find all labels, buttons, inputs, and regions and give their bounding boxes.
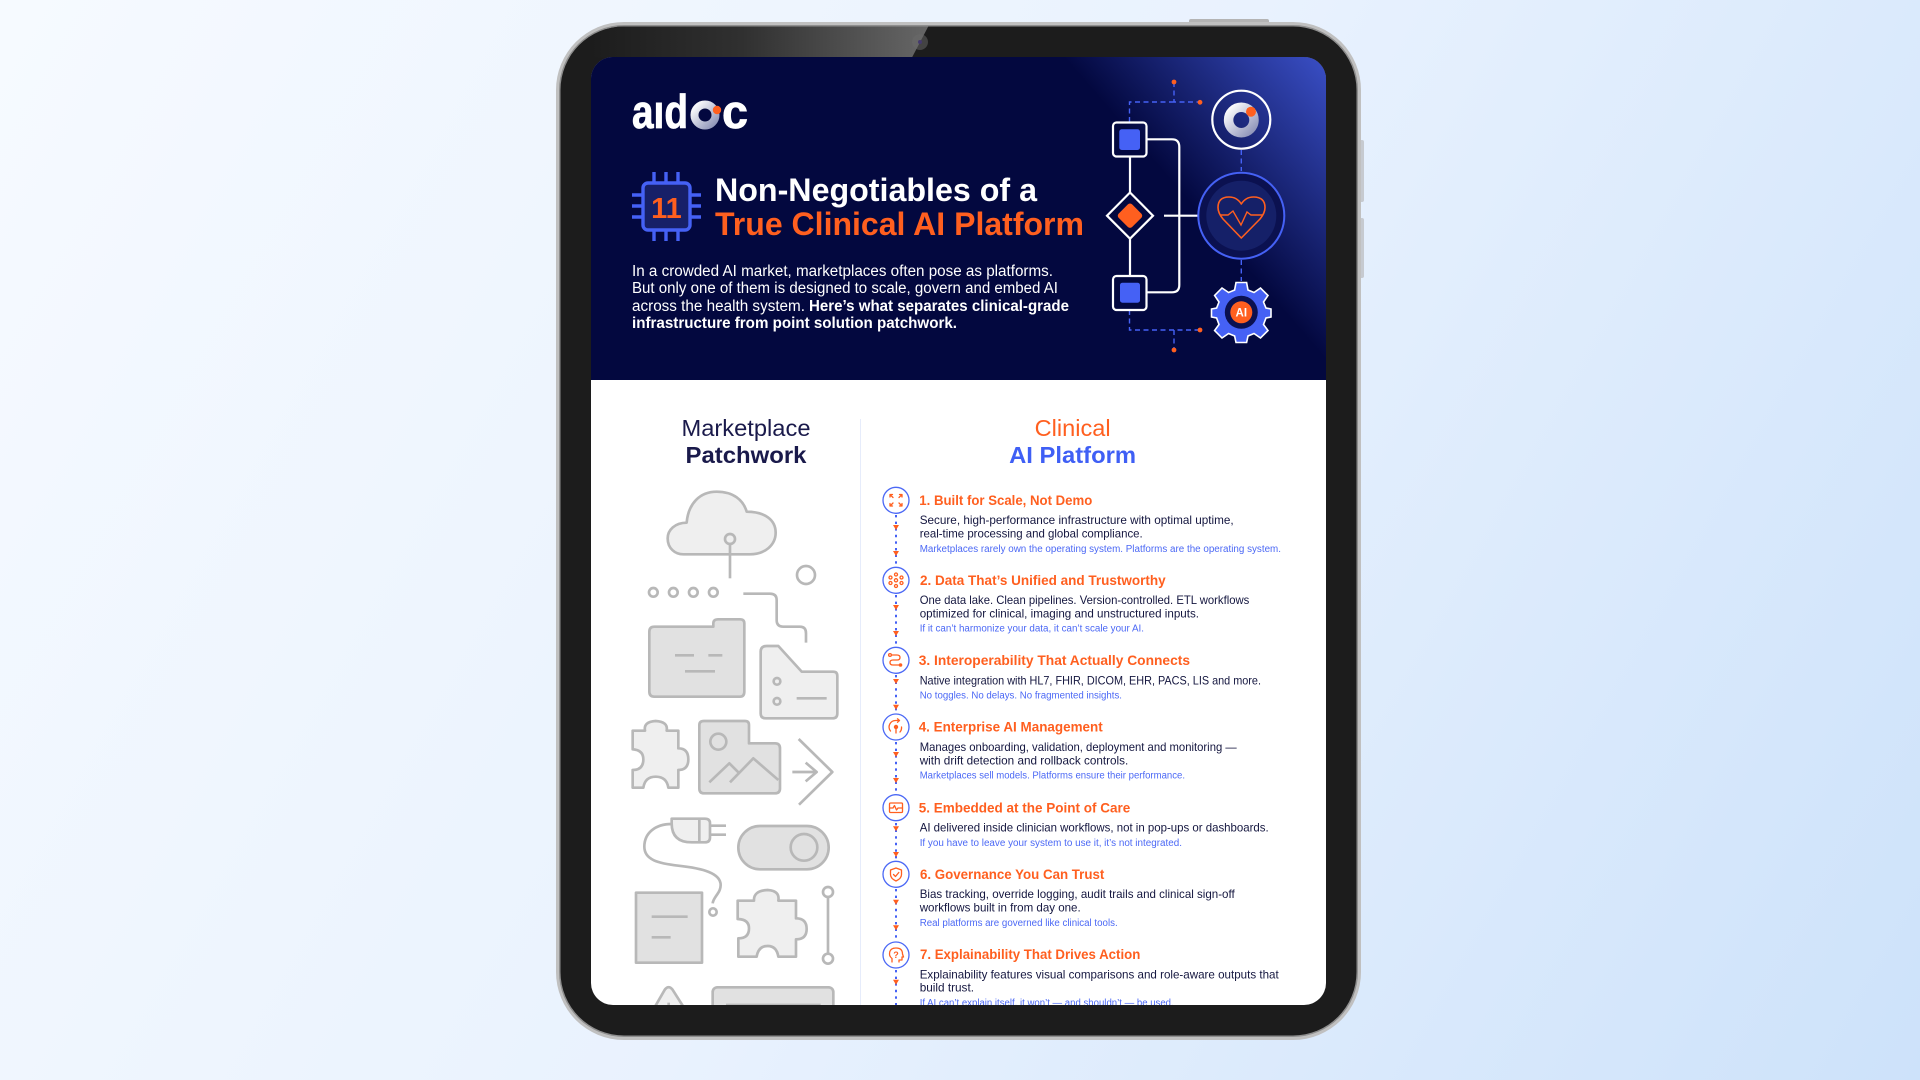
column heading: Clinical AI Platform — [1010, 419, 1135, 463]
item 3: Interoperability That Actually Connects — [883, 647, 1261, 702]
item 3: Interoperability That Actually Connects: No toggles. No delays. No fragmented insights. — [920, 691, 1122, 702]
item 6: Governance You Can Trust — [883, 861, 1235, 929]
intro paragraph: infrastructure from point solution patchwork. — [632, 315, 957, 332]
icons: cloud and folders — [649, 492, 837, 718]
intro paragraph: But only one of them is designed to scale, govern and embed AI — [632, 280, 1058, 297]
item 4: Enterprise AI Management: with drift detection and rollback controls. — [919, 753, 1128, 767]
item 3: Interoperability That Actually Connects: Native integration with HL7, FHIR, DICOM, EHR, PACS, LIS and more. — [920, 673, 1261, 687]
item 1: Built for Scale, Not Demo: real-time processing and global compliance. — [920, 526, 1143, 540]
icon: chip with number 11 — [632, 172, 701, 241]
column heading: Clinical AI Platform: AI Platform — [1009, 442, 1136, 468]
title: True Clinical AI Platform — [715, 206, 1084, 242]
item 7: Explainability That Drives Action: If AI can’t explain itself, it won’t — and shouldn’t — be used. — [920, 998, 1174, 1009]
item 2: Data That's Unified and Trustworthy: One data lake. Clean pipelines. Version-controlled. ETL workflows — [920, 593, 1249, 607]
item 2: Data That's Unified and Trustworthy: If it can’t harmonize your data, it can’t scale your AI. — [920, 624, 1144, 635]
logo: aidoc: aıd — [632, 85, 688, 138]
icon: shield check — [883, 861, 909, 887]
item 1: Built for Scale, Not Demo: Secure, high-performance infrastructure with optimal uptime, — [920, 513, 1234, 527]
icon: monitor with pulse — [883, 795, 909, 821]
icon: route — [883, 647, 909, 673]
title — [715, 178, 1082, 236]
intro paragraph: Here’s what separates clinical-grade — [809, 298, 1069, 315]
icon: data network — [883, 567, 909, 593]
item 4: Enterprise AI Management — [883, 714, 1237, 781]
logo: aidoc: c — [722, 85, 748, 138]
item 6: Governance You Can Trust: Real platforms are governed like clinical tools. — [920, 918, 1118, 929]
item 7: Explainability That Drives Action: 7. Explainability That Drives Action — [920, 946, 1140, 962]
item 7: Explainability That Drives Action: build trust. — [920, 981, 974, 995]
item 6: Governance You Can Trust: workflows built in from day one. — [919, 900, 1081, 914]
icon: AI gear — [1212, 282, 1271, 342]
item 2: Data That's Unified and Trustworthy: 2. Data That’s Unified and Trustworthy — [920, 572, 1166, 588]
icons: puzzle, image, arrow, plug, toggle, document — [633, 721, 833, 1017]
icon: heart with pulse — [1198, 173, 1284, 259]
icon: chip with number 11: 11 — [651, 193, 682, 225]
item 5: Embedded at the Point of Care — [883, 795, 1269, 849]
tablet device frame — [556, 19, 1364, 1040]
icon: head with question mark: ? — [893, 950, 899, 960]
item 2: Data That's Unified and Trustworthy — [883, 567, 1249, 635]
item 3: Interoperability That Actually Connects: 3. Interoperability That Actually Connects — [919, 652, 1190, 668]
intro paragraph: across the health system. — [632, 298, 805, 315]
item 6: Governance You Can Trust: Bias tracking, override logging, audit trails and clinical sign-off — [920, 887, 1235, 901]
icon: management cycle — [883, 714, 909, 740]
item 2: Data That's Unified and Trustworthy: optimized for clinical, imaging and unstructured inputs. — [920, 606, 1199, 620]
item 5: Embedded at the Point of Care: 5. Embedded at the Point of Care — [919, 799, 1130, 815]
item 4: Enterprise AI Management: 4. Enterprise AI Management — [919, 719, 1103, 735]
icon: AI gear: AI — [1236, 308, 1247, 320]
logo: aidoc — [632, 93, 748, 130]
workflow diagram — [1107, 80, 1284, 352]
item 4: Enterprise AI Management: Marketplaces sell models. Platforms ensure their performance. — [920, 770, 1185, 781]
item 1: Built for Scale, Not Demo: Marketplaces rarely own the operating system. Platforms are the operating system. — [920, 544, 1281, 555]
item 7: Explainability That Drives Action: Explainability features visual comparisons and role-aware outputs that — [920, 968, 1279, 982]
icon: expand arrows — [883, 487, 909, 513]
item 5: Embedded at the Point of Care: AI delivered inside clinician workflows, not in pop-ups or dashboards. — [920, 820, 1269, 834]
column heading: Marketplace Patchwork: Marketplace — [682, 415, 810, 441]
icon: logo ring circle — [1212, 91, 1270, 149]
intro paragraph: In a crowded AI market, marketplaces often pose as platforms. — [632, 263, 1053, 280]
intro paragraph — [632, 263, 1069, 332]
column heading: Marketplace Patchwork — [683, 419, 810, 463]
icon: head with question mark — [883, 942, 909, 968]
column heading: Clinical AI Platform: Clinical — [1035, 415, 1111, 441]
item 5: Embedded at the Point of Care: If you have to leave your system to use it, it’s not integrated. — [920, 838, 1182, 849]
tablet screen — [591, 57, 1326, 1017]
item 1: Built for Scale, Not Demo — [883, 487, 1281, 555]
timeline connectors — [893, 515, 899, 1005]
item 6: Governance You Can Trust: 6. Governance You Can Trust — [920, 866, 1105, 882]
item 4: Enterprise AI Management: Manages onboarding, validation, deployment and monitoring — — [920, 740, 1237, 754]
item 1: Built for Scale, Not Demo: 1. Built for Scale, Not Demo — [919, 492, 1092, 508]
title: Non-Negotiables of a — [715, 172, 1037, 208]
illustration: patchwork icons — [633, 492, 837, 1017]
column heading: Marketplace Patchwork: Patchwork — [686, 442, 807, 468]
item 7: Explainability That Drives Action — [883, 942, 1279, 1009]
header panel — [591, 57, 1326, 380]
